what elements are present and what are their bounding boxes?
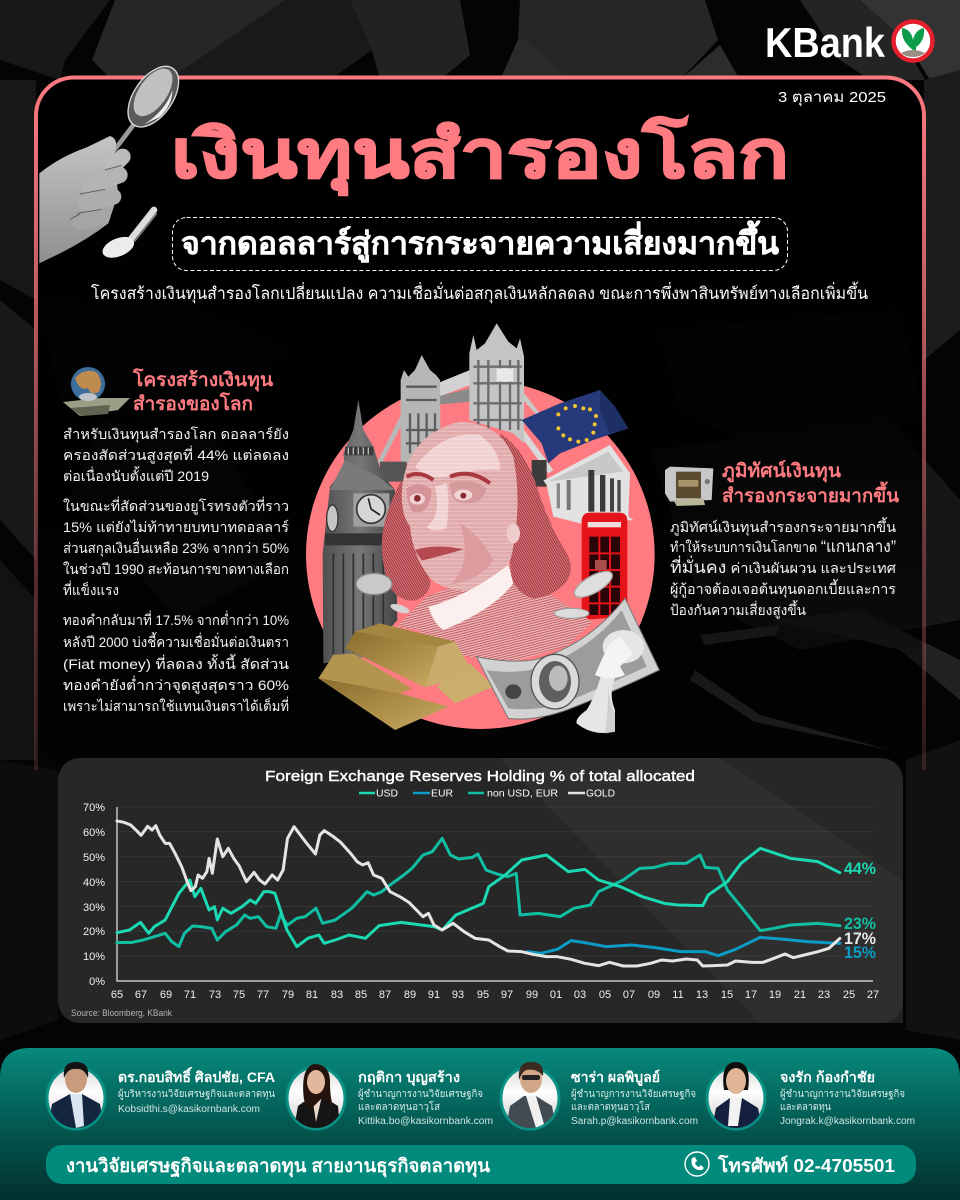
text block: landscape explanation xyxy=(670,517,896,619)
series: GOLD xyxy=(117,821,840,966)
icon: tilted spoon-shaped lens xyxy=(100,210,157,262)
end labels xyxy=(844,859,876,962)
Big Ben xyxy=(323,400,397,663)
text block: dollar share: สำหรับเงินทุนสำรองโลก ดอลลาร์ยัง xyxy=(63,426,289,443)
chart title: Foreign Exchange Reserves Holding % of total allocated xyxy=(265,768,695,785)
Tower Bridge xyxy=(377,323,553,487)
text block: gold: (Fiat money) ที่ลดลง ทั้งนี้ สัดส่วน xyxy=(63,654,289,672)
y axis labels: 50% xyxy=(83,852,105,864)
y axis labels: 30% xyxy=(83,902,105,914)
y axis labels: 60% xyxy=(83,827,105,839)
text block: dollar share: ต่อเนื่องนับตั้งแต่ปี 2019 xyxy=(63,466,209,484)
x axis labels: 85 xyxy=(355,989,367,1001)
person: Jongrak: ผู้ชำนาญการงานวิจัยเศรษฐกิจ xyxy=(780,1088,905,1100)
text block: landscape explanation: ที่มั่นคง ค่าเงินผันผวน และประเทศ xyxy=(670,555,896,577)
end labels: 44% xyxy=(844,859,876,878)
central illustration collage xyxy=(306,323,659,733)
x axis labels: 95 xyxy=(477,989,489,1001)
text block: gold: เพราะไม่สามารถใช้แทนเงินตราได้เต็มที่ xyxy=(63,697,289,714)
heading: diversified reserve landscape: สำรองกระจายมากขึ้น xyxy=(722,481,899,507)
icon: open safe with money xyxy=(665,467,713,506)
person: Jongrak: Jongrak.k@kasikornbank.com xyxy=(780,1116,915,1127)
person: Kittika xyxy=(287,1064,493,1129)
Franklin portrait xyxy=(382,422,593,663)
x axis labels: 11 xyxy=(672,989,684,1001)
person: Sarah xyxy=(501,1062,698,1129)
text block: landscape explanation: ป้องกันความเสี่ยงสูงขึ้น xyxy=(670,600,806,619)
x axis labels: 25 xyxy=(843,989,855,1001)
x axis labels: 19 xyxy=(769,989,781,1001)
person: Kobsidthi xyxy=(47,1062,275,1129)
x axis labels: 99 xyxy=(526,989,538,1001)
x axis labels: 83 xyxy=(331,989,343,1001)
person: Sarah: และตลาดทุนอาวุโส xyxy=(571,1100,650,1113)
department and phone bar: งานวิจัยเศรษฐกิจและตลาดทุน สายงานธุรกิจตลาดทุน xyxy=(66,1155,490,1178)
y axis labels: 10% xyxy=(83,951,105,963)
y axis labels xyxy=(83,802,105,988)
chart source: Source: Bloomberg, KBank xyxy=(71,1008,172,1018)
x axis labels: 23 xyxy=(818,989,830,1001)
icon: globe on banknotes xyxy=(63,367,130,416)
y axis labels: 0% xyxy=(89,976,105,988)
x axis labels: 07 xyxy=(623,989,635,1001)
x axis labels: 89 xyxy=(404,989,416,1001)
chart lines xyxy=(117,821,840,966)
heading: diversified reserve landscape xyxy=(722,460,899,507)
text block: euro and other currencies: ส่วนสกุลเงินอื่นเหลือ 23% จากกว่า 50% xyxy=(63,539,289,557)
text block: landscape explanation: ผู้กู้อาจต้องเจอต้นทุนดอกเบี้ยและการ xyxy=(670,579,896,598)
series: EUR xyxy=(527,937,840,956)
x axis labels: 03 xyxy=(574,989,586,1001)
x axis labels: 05 xyxy=(599,989,611,1001)
icon: hand holding magnifying glass xyxy=(39,57,189,263)
panel: footer contacts xyxy=(0,1048,960,1200)
y axis labels: 40% xyxy=(83,877,105,889)
text block: euro and other currencies: ในขณะที่สัดส่วนของยูโรทรงตัวที่ราว xyxy=(63,497,289,515)
x axis labels: 75 xyxy=(233,989,245,1001)
person: Sarah: ผู้ชำนาญการงานวิจัยเศรษฐกิจ xyxy=(571,1088,696,1100)
x axis labels: 97 xyxy=(501,989,513,1001)
x axis labels: 09 xyxy=(648,989,660,1001)
date: 3 ตุลาคม 2025 xyxy=(778,89,886,107)
end labels: 17% xyxy=(844,929,876,948)
person: Jongrak: และตลาดทุน xyxy=(780,1102,831,1113)
text block: gold xyxy=(63,611,289,714)
person: Kittika: ผู้ชำนาญการงานวิจัยเศรษฐกิจ xyxy=(358,1088,483,1100)
x axis labels: 67 xyxy=(135,989,147,1001)
white chess queen xyxy=(576,637,633,733)
text block: gold: ทองคำยังต่ำกว่าจุดสูงสุดราว 60% xyxy=(63,676,289,694)
series: USD xyxy=(117,848,840,947)
x axis labels: 65 xyxy=(111,989,123,1001)
red telephone box xyxy=(582,513,627,620)
x axis labels: 17 xyxy=(745,989,757,1001)
department and phone bar: โทรศัพท์ 02-4705501 xyxy=(717,1154,895,1176)
text block: dollar share: ครองสัดส่วนสูงสุดที่ 44% แต่ลดลง xyxy=(63,446,289,464)
main frame outline xyxy=(36,78,924,770)
x axis labels: 79 xyxy=(282,989,294,1001)
person: Jongrak: จงรัก ก้องกำชัย xyxy=(780,1069,875,1085)
panel: right text column xyxy=(665,460,899,619)
y axis labels: 20% xyxy=(83,926,105,938)
panel: line chart of reserves xyxy=(58,758,903,1023)
coral circle xyxy=(306,380,655,729)
person: Kobsidthi: Kobsidthi.s@kasikornbank.com xyxy=(118,1104,260,1115)
x axis labels: 73 xyxy=(209,989,221,1001)
chart legend: non USD, EUR xyxy=(487,788,558,800)
x axis labels: 69 xyxy=(160,989,172,1001)
text block: euro and other currencies: 15% แต่ยังไม่ท้าทายบทบาทดอลลาร์ xyxy=(63,519,289,535)
gold bars xyxy=(318,623,493,730)
subtitle box xyxy=(172,218,788,270)
x axis labels: 27 xyxy=(867,989,879,1001)
x axis labels: 87 xyxy=(379,989,391,1001)
person: Jongrak xyxy=(707,1062,915,1129)
x axis labels: 71 xyxy=(184,989,196,1001)
end labels: 15% xyxy=(844,943,876,962)
end labels: 23% xyxy=(844,914,876,933)
text block: gold: หลังปี 2000 บ่งชี้ความเชื่อมั่นต่อเงินตรา xyxy=(63,632,289,650)
text block: gold: ทองคำกลับมาที่ 17.5% จากต่ำกว่า 10% xyxy=(63,611,289,628)
heading: diversified reserve landscape: ภูมิทัศน์เงินทุน xyxy=(722,460,841,483)
chart legend: EUR xyxy=(431,788,453,800)
x axis labels: 15 xyxy=(721,989,733,1001)
person: Kobsidthi: ผู้บริหารงานวิจัยเศรษฐกิจและตลาดทุน xyxy=(118,1088,275,1100)
x axis labels: 77 xyxy=(257,989,269,1001)
department and phone bar xyxy=(46,1145,916,1184)
subtitle box: จากดอลลาร์สู่การกระจายความเสี่ยงมากขึ้น xyxy=(181,220,779,263)
bank building xyxy=(543,445,633,524)
person: Kittika: Kittika.bo@kasikornbank.com xyxy=(358,1116,493,1127)
text block: landscape explanation: ภูมิทัศน์เงินทุนสำรองกระจายมากขึ้น xyxy=(670,517,896,536)
x axis labels: 13 xyxy=(696,989,708,1001)
x axis labels: 01 xyxy=(550,989,562,1001)
text block: euro and other currencies xyxy=(63,497,289,598)
x axis labels: 81 xyxy=(306,989,318,1001)
person: Kittika: และตลาดทุนอาวุโส xyxy=(358,1100,440,1113)
chart legend: GOLD xyxy=(586,788,615,800)
x axis labels xyxy=(111,989,879,1001)
dollar banknote xyxy=(477,598,659,719)
person: Sarah: Sarah.p@kasikornbank.com xyxy=(571,1116,698,1127)
text block: euro and other currencies: ในช่วงปี 1990 สะท้อนการขาดทางเลือก xyxy=(63,561,289,577)
heading: global reserve structure: สำรองของโลก xyxy=(133,392,253,415)
chart legend: USD xyxy=(376,788,398,800)
title: เงินทุนสำรองโลก xyxy=(171,115,789,196)
text block: landscape explanation: ทำให้ระบบการเงินโลกขาด “แกนกลาง” xyxy=(670,537,896,556)
EU flag xyxy=(522,390,628,463)
x axis labels: 93 xyxy=(452,989,464,1001)
chart legend xyxy=(359,788,615,800)
panel: left text column xyxy=(63,367,289,714)
y axis labels: 70% xyxy=(83,802,105,814)
text block: dollar share xyxy=(63,426,289,484)
heading: global reserve structure xyxy=(132,368,273,415)
person: Kobsidthi: ดร.กอบสิทธิ์ ศิลปชัย, CFA xyxy=(118,1066,275,1085)
person: Sarah: ซาร่า ผลพิบูลย์ xyxy=(571,1069,660,1086)
person: Kittika: กฤติกา บุญสร้าง xyxy=(358,1069,460,1086)
x axis labels: 21 xyxy=(794,989,806,1001)
icon: phone xyxy=(685,1152,709,1176)
silver coins xyxy=(356,566,616,618)
x axis labels: 91 xyxy=(428,989,440,1001)
intro text: โครงสร้างเงินทุนสำรองโลกเปลี่ยนแปลง ความเชื่อมั่นต่อสกุลเงินหลักลดลง ขณะการพึ่งพาสินทรัพย์ทางเลือกเพิ่มขึ้น xyxy=(91,281,868,304)
series: non USD, EUR xyxy=(117,838,840,947)
text block: euro and other currencies: ที่แข็งแรง xyxy=(63,581,119,598)
KBank logo: KBank xyxy=(765,19,886,66)
heading: global reserve structure: โครงสร้างเงินทุน xyxy=(132,368,273,392)
